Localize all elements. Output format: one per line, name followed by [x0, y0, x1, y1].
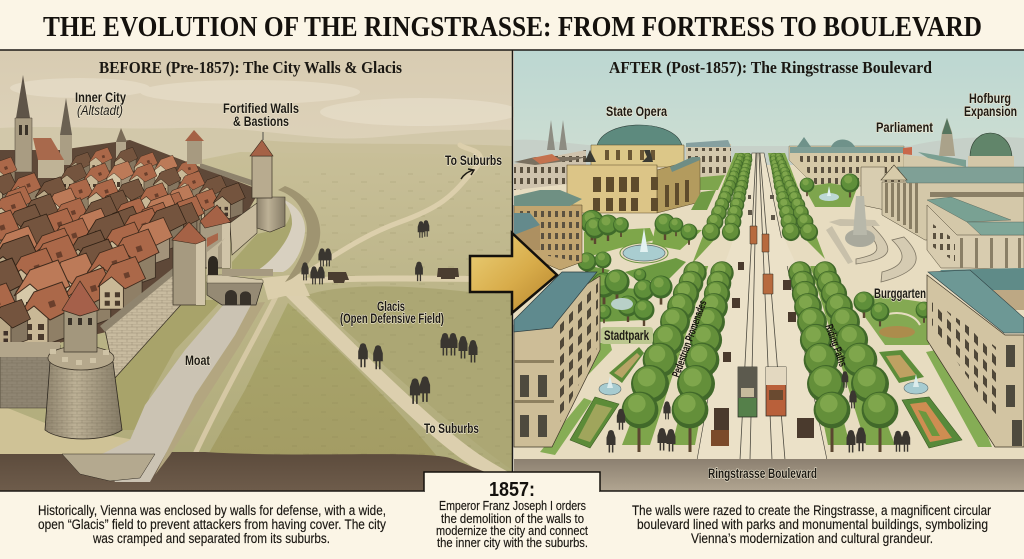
text: before description: was cramped and separated from its suburbs. [92, 531, 330, 546]
text: after description: Vienna’s modernization and cultural grandeur. [691, 531, 933, 546]
distant town [514, 120, 731, 190]
band: boulevard [514, 459, 1024, 491]
fountain: main [620, 228, 668, 263]
road junction [262, 274, 310, 300]
building: centre right [789, 137, 904, 186]
tram rails [740, 153, 785, 460]
field texture [200, 170, 512, 480]
houses [69, 152, 93, 179]
building: hofburg wing [927, 197, 1024, 270]
tower: bastion right [250, 132, 285, 232]
road [697, 153, 827, 460]
text: after description: boulevard lined with parks and monumental buildings, symbolizing [637, 517, 988, 532]
state opera [567, 125, 700, 213]
church [15, 75, 127, 178]
label: fortified walls: Fortified Walls [223, 101, 299, 116]
label: fortified walls: & Bastions [233, 114, 289, 129]
label: stadtpark: Stadtpark [604, 328, 649, 343]
left park [578, 210, 704, 326]
moat upper [255, 198, 305, 272]
label: to suburbs upper: To Suburbs [445, 153, 502, 168]
earth band [0, 452, 512, 491]
moat bank upper [232, 206, 293, 274]
callout heading: 1857: [489, 479, 535, 501]
road upper restore [724, 238, 797, 266]
soldiers [301, 220, 478, 404]
label: to suburbs lower: To Suburbs [424, 421, 479, 436]
label: pedestrian promenades: Pedestrian Promenades [671, 299, 710, 379]
label: ringstrasse boulevard: Ringstrasse Boulevard [708, 466, 817, 481]
frame lines [0, 50, 1024, 491]
hills [0, 127, 512, 175]
callout text: Emperor Franz Joseph I orders [439, 499, 586, 513]
back wall [230, 203, 257, 255]
field: central triangle [205, 303, 440, 460]
small garden [691, 190, 716, 210]
monument [826, 196, 916, 282]
label: inner city: (Altstadt) [77, 103, 123, 118]
label: inner city [75, 90, 126, 118]
main wall [100, 257, 187, 378]
tree lawns [622, 153, 895, 445]
label: burggarten: Burggarten [874, 286, 926, 301]
text: before description: Historically, Vienna was enclosed by walls for defense, with a wide, [38, 503, 386, 518]
left wall [0, 342, 60, 408]
tower: gate [172, 205, 231, 305]
tower: round bastion front [45, 281, 122, 439]
clouds [10, 78, 520, 126]
skyline [514, 137, 1024, 190]
moat bank outer [278, 186, 320, 282]
crossroad [690, 238, 832, 266]
panel: before [0, 50, 520, 491]
pedestrians [606, 371, 910, 452]
panel: after [514, 50, 1024, 491]
moat bank [115, 300, 222, 430]
callout text: the inner city with the suburbs. [437, 536, 588, 550]
label: glacis: Glacis [377, 299, 405, 314]
city [0, 75, 260, 350]
callout text: the demolition of the walls to [441, 512, 584, 526]
trams [738, 226, 786, 417]
label: riding paths: Riding Paths [822, 323, 849, 368]
burggarten [854, 292, 932, 345]
road network [196, 145, 512, 482]
building: front right [927, 268, 1024, 447]
gardens [540, 174, 992, 455]
label: stadtpark [601, 327, 653, 344]
callout: 1857 [424, 472, 600, 550]
field: foreground left [0, 405, 155, 456]
label: inner city: Inner City [75, 90, 126, 105]
moat lower [100, 303, 252, 482]
parliament [861, 165, 1024, 240]
heading: after: AFTER (Post-1857): The Ringstrasse Boulevard [609, 58, 932, 77]
carriages [711, 195, 814, 446]
label: state opera: State Opera [606, 104, 667, 119]
label: fortified walls [223, 101, 299, 129]
label: hofburg expansion: Hofburg [969, 91, 1011, 106]
arrow: to suburbs [461, 169, 474, 179]
label: glacis: (Open Defensive Field) [340, 311, 444, 326]
tower: distant [185, 130, 204, 164]
building: front left [514, 272, 600, 447]
heading: before: BEFORE (Pre-1857): The City Walls & Glacis [99, 58, 402, 77]
callout text: modernize the city and connect [436, 524, 588, 538]
arrow: transition [470, 233, 557, 313]
label: glacis [340, 299, 444, 326]
bridge [207, 269, 273, 305]
label: moat: Moat [185, 353, 210, 368]
label: parliament: Parliament [876, 120, 933, 135]
field: upper glacis [0, 152, 512, 480]
text: before description: open “Glacis” field to prevent attackers from having cover. The city [38, 517, 386, 532]
tree rows [622, 153, 898, 452]
back right skyline [903, 118, 1014, 168]
building: mid left [514, 190, 582, 270]
moat foot [62, 454, 155, 481]
label: hofburg expansion [964, 91, 1017, 119]
ground [514, 165, 1024, 460]
field: right lower glacis [307, 286, 512, 470]
